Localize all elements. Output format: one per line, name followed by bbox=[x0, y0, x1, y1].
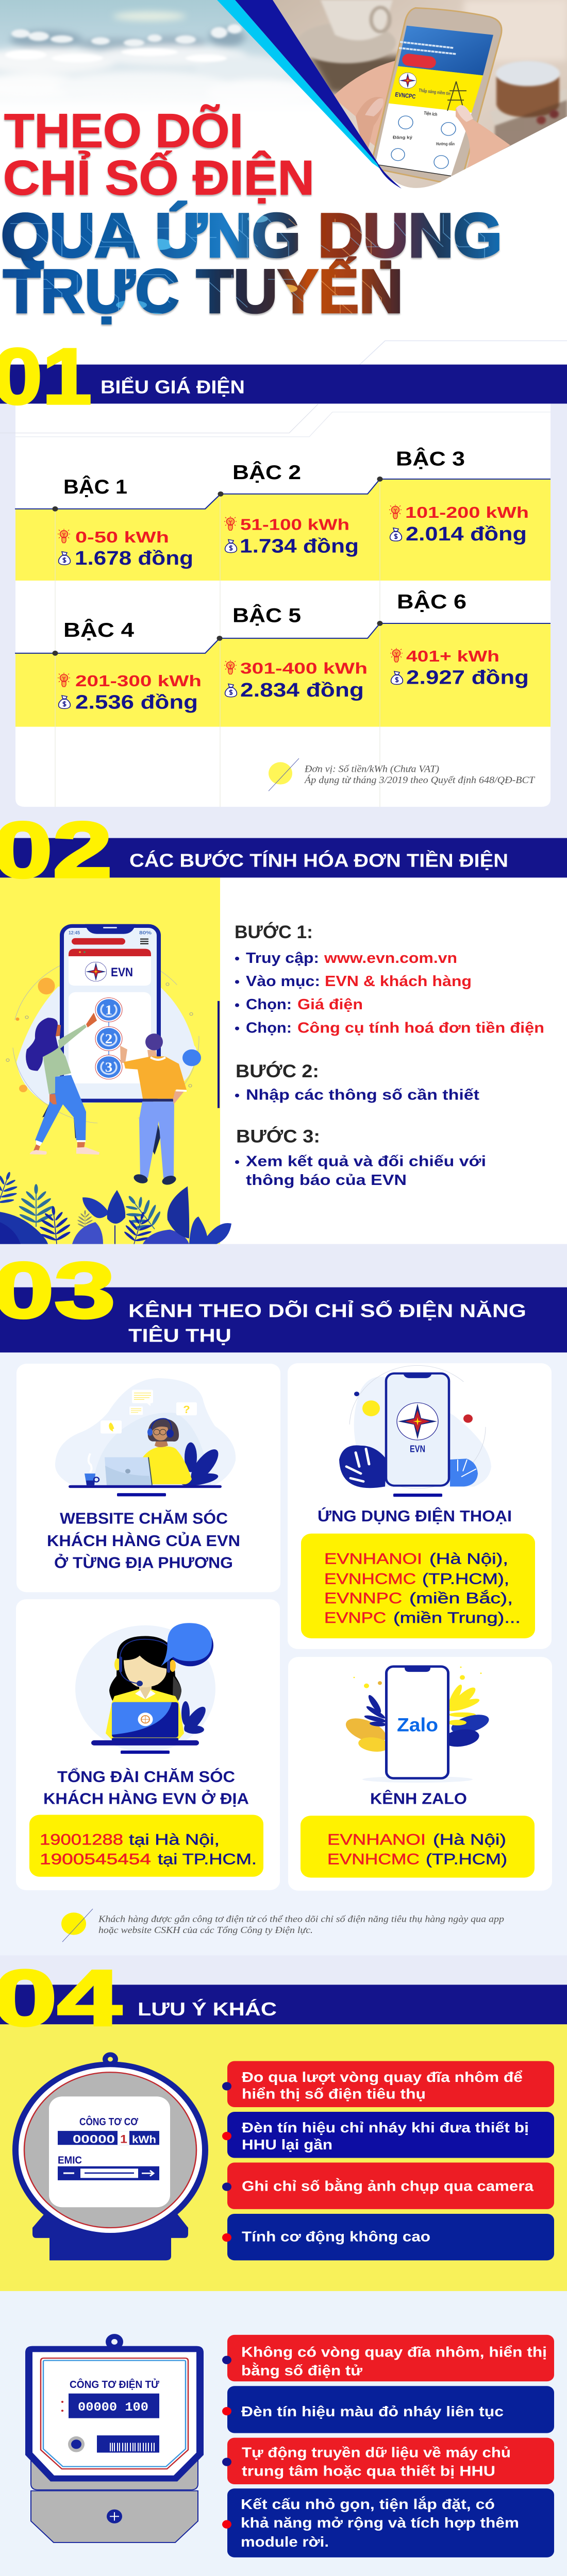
yellow staircase row 2 bbox=[15, 623, 551, 727]
section 03 header bar: KÊNH THEO DÕI CHỈ SỐ ĐIỆN NĂNG bbox=[128, 1299, 526, 1321]
card heading: ỨNG DỤNG ĐIỆN THOẠI bbox=[318, 1507, 512, 1525]
step 1 text bbox=[235, 922, 544, 1036]
tier 4: BẬC 4 bbox=[63, 619, 134, 641]
note: rotation: Đo qua lượt vòng quay đĩa nhôm để bbox=[242, 2070, 523, 2086]
tier 1: 0-50 kWh bbox=[75, 528, 169, 546]
cake and tray bbox=[490, 61, 567, 158]
phone screen: EVNCPC bbox=[395, 91, 416, 100]
note: signal light: Đèn tín hiệu chỉ nháy khi đưa thiết bị bbox=[242, 2120, 529, 2136]
price footnote: Áp dụng từ tháng 3/2019 theo Quyết định 648/QĐ-BCT bbox=[304, 774, 536, 786]
yellow list box: (miền Trung)... bbox=[393, 1609, 521, 1626]
mechanical meter: 00000 bbox=[73, 2133, 115, 2146]
title bbox=[1, 104, 502, 326]
note: photo reading bbox=[222, 2163, 554, 2209]
mechanical meter notes bbox=[222, 2061, 554, 2260]
icon: support agent with laptop bbox=[55, 1378, 236, 1496]
icon: EVN phone: EVN bbox=[410, 1444, 425, 1454]
phone bbox=[62, 924, 159, 1100]
note: mobility bbox=[222, 2214, 554, 2260]
tier 5: 2.834 đồng bbox=[240, 680, 364, 701]
step 3 text: BƯỚC 3: bbox=[236, 1126, 320, 1146]
section 02 header bar bbox=[0, 806, 567, 894]
tier 4: 201-300 kWh bbox=[75, 672, 202, 690]
step circle 3: 3 bbox=[105, 1060, 112, 1075]
card heading: KHÁCH HÀNG CỦA EVN bbox=[47, 1532, 240, 1550]
step 3 text: thông báo của EVN bbox=[246, 1172, 407, 1188]
note: rotation bbox=[222, 2061, 554, 2107]
step 2 text bbox=[235, 1061, 479, 1103]
yellow staircase row 1 bbox=[15, 479, 551, 581]
yellow hotline box: 19001288 bbox=[40, 1831, 123, 1848]
woman pointing bbox=[26, 1012, 99, 1155]
step 2 text: Nhập các thông số cần thiết bbox=[246, 1087, 479, 1103]
icon: support agent with laptop: ? bbox=[183, 1404, 190, 1415]
note: signal light bbox=[222, 2112, 554, 2158]
tier 4: 2.536 đồng bbox=[75, 691, 198, 713]
step 2 text: BƯỚC 2: bbox=[236, 1061, 319, 1081]
note: digital display: bằng số điện tử bbox=[241, 2362, 363, 2379]
tier 2 bbox=[224, 461, 359, 557]
section 02 header bar: CÁC BƯỚC TÍNH HÓA ĐƠN TIỀN ĐIỆN bbox=[129, 850, 508, 871]
phone screen: Thắp sáng niềm tin bbox=[419, 88, 451, 97]
section 02 panels bbox=[0, 877, 567, 1244]
background table and cup bbox=[297, 0, 567, 93]
title: red lines: CHỈ SỐ ĐIỆN bbox=[3, 150, 314, 206]
step 1 text: Giá điện bbox=[297, 996, 363, 1013]
note: mobility: Tính cơ động không cao bbox=[242, 2229, 430, 2245]
tier 5: 301-400 kWh bbox=[240, 659, 368, 677]
step 1 text: BƯỚC 1: bbox=[235, 922, 313, 942]
tier 3: BẬC 3 bbox=[396, 448, 465, 470]
note: compact structure: Kết cấu nhỏ gọn, tiện lắp đặt, có bbox=[241, 2496, 495, 2513]
note: red signal bbox=[222, 2386, 554, 2433]
title: circuit gradient lines: TRỰC TUYẾN bbox=[3, 256, 403, 326]
electronic meter: CÔNG TƠ ĐIỆN TỬ bbox=[70, 2379, 160, 2391]
note: compact structure: khả năng mở rộng và tích hợp thêm bbox=[241, 2515, 519, 2531]
tier 2: BẬC 2 bbox=[232, 461, 301, 483]
mechanical meter: kWh bbox=[132, 2133, 156, 2145]
step 1 text: Công cụ tính hoá đơn tiền điện bbox=[297, 1020, 544, 1036]
man pointing bbox=[120, 1033, 187, 1187]
yellow Zalo box: (TP.HCM) bbox=[426, 1851, 507, 1868]
step 1 text: Vào mục: bbox=[246, 973, 320, 990]
diagonal cyan and blue ribbons bbox=[217, 0, 402, 189]
card heading bbox=[43, 1768, 249, 1807]
channel footnote bbox=[61, 1909, 504, 1942]
phone screen: Hướng dẫn bbox=[436, 141, 455, 146]
channel footnote: hoặc website CSKH của các Tổng Công ty Điện lực. bbox=[98, 1925, 313, 1936]
yellow Zalo box: EVNHANOI bbox=[327, 1831, 426, 1848]
section 04 header bar bbox=[0, 1954, 567, 2042]
section 03 header bar: TIÊU THỤ bbox=[128, 1325, 231, 1346]
card heading: TỔNG ĐÀI CHĂM SÓC bbox=[57, 1768, 235, 1786]
title: circuit gradient lines bbox=[1, 200, 502, 326]
title: red lines bbox=[3, 104, 314, 206]
step 1 text: Chọn: bbox=[246, 1020, 292, 1036]
icon: Zalo phone bbox=[342, 1667, 491, 1783]
left hand bbox=[332, 60, 396, 149]
step 1 text: Chọn: bbox=[246, 996, 292, 1013]
foliage bbox=[0, 1168, 231, 1247]
yellow list box: (miền Bắc), bbox=[409, 1590, 513, 1607]
tier 1 bbox=[58, 476, 193, 569]
card heading: WEBSITE CHĂM SÓC bbox=[60, 1509, 228, 1527]
yellow list box bbox=[301, 1534, 535, 1638]
yellow list box: (TP.HCM), bbox=[422, 1570, 509, 1587]
tier 3: 2.014 đồng bbox=[406, 523, 527, 545]
step 1 text: Truy cập: bbox=[246, 950, 319, 966]
section 01 header bar: BIỂU GIÁ ĐIỆN bbox=[101, 376, 245, 398]
electronic meter notes bbox=[222, 2335, 554, 2557]
title: red lines: THEO DÕI bbox=[4, 104, 243, 157]
background blob and orbits bbox=[6, 955, 201, 1124]
price footnote bbox=[269, 758, 536, 791]
mechanical meter bbox=[12, 2052, 208, 2260]
note: digital display: Không có vòng quay đĩa nhôm, hiển thị bbox=[241, 2344, 547, 2360]
section 01 header bar bbox=[0, 332, 567, 421]
yellow list box: EVNHCMC bbox=[324, 1570, 416, 1587]
step 3 text bbox=[235, 1126, 486, 1188]
section 03 panel bbox=[0, 1352, 567, 1955]
card heading bbox=[47, 1509, 240, 1571]
section 04 backgrounds bbox=[0, 2024, 567, 2576]
phone body bbox=[373, 8, 502, 183]
note: signal light: HHU lại gần bbox=[242, 2137, 332, 2153]
fingers bbox=[356, 97, 510, 171]
illustration: people using EVN phone app bbox=[0, 924, 231, 1247]
note: rotation: hiển thị số điện tiêu thụ bbox=[242, 2086, 426, 2102]
mechanical meter: 1 bbox=[120, 2133, 127, 2146]
phone screen: Tiện ích bbox=[424, 111, 438, 117]
step circle 2 bbox=[95, 1027, 122, 1051]
yellow list box: EVNNPC bbox=[324, 1590, 402, 1607]
tier 1: 1.678 đồng bbox=[75, 548, 193, 569]
icon: call centre agent bbox=[75, 1623, 215, 1754]
step circle 2: 2 bbox=[105, 1031, 112, 1046]
note: data transfer: Tự động truyền dữ liệu về máy chủ bbox=[242, 2445, 511, 2461]
yellow hotline box bbox=[29, 1815, 263, 1877]
note: data transfer: trung tâm hoặc qua thiết bị HHU bbox=[242, 2463, 495, 2479]
mechanical meter: CÔNG TƠ CƠ bbox=[79, 2116, 138, 2128]
card: website bbox=[16, 1364, 280, 1592]
yellow Zalo box bbox=[301, 1816, 535, 1877]
tier 6: BẬC 6 bbox=[397, 590, 466, 613]
tier 2: 1.734 đồng bbox=[240, 535, 359, 557]
step circle 3 bbox=[95, 1055, 122, 1079]
phone: 12:45 bbox=[69, 930, 80, 936]
icon: EVN phone bbox=[339, 1365, 491, 1497]
tier 5: BẬC 5 bbox=[232, 604, 301, 626]
tier 6: 2.927 đồng bbox=[406, 667, 529, 688]
tier 5 bbox=[224, 604, 368, 701]
tier 4 bbox=[58, 619, 202, 713]
yellow Zalo box: EVNHCMC bbox=[327, 1851, 420, 1868]
section 03 header bar bbox=[0, 1246, 567, 1352]
yellow hotline box: tại Hà Nội, bbox=[129, 1831, 220, 1848]
card heading: Ở TỪNG ĐỊA PHƯƠNG bbox=[54, 1553, 233, 1571]
hero photo: hand holding phone with EVNCPC app bbox=[268, 0, 567, 200]
card heading: KHÁCH HÀNG EVN Ở ĐỊA bbox=[43, 1789, 249, 1807]
tier 6 bbox=[390, 590, 529, 688]
phone screen bbox=[375, 26, 493, 176]
note: red signal: Đèn tín hiệu màu đỏ nháy liên tục bbox=[241, 2403, 504, 2420]
phone: 80% bbox=[139, 930, 152, 936]
yellow hotline box: 1900545454 bbox=[40, 1851, 151, 1868]
mechanical meter: EMIC bbox=[58, 2155, 82, 2166]
tier 1: BẬC 1 bbox=[63, 476, 127, 498]
section 01 card bbox=[0, 403, 551, 807]
tier 6: 401+ kWh bbox=[406, 648, 499, 665]
card: call centre bbox=[16, 1599, 280, 1890]
divider bar bbox=[218, 1001, 220, 1108]
electronic meter: 00000 100 bbox=[78, 2400, 148, 2415]
tier 2: 51-100 kWh bbox=[240, 516, 349, 533]
note: digital display bbox=[222, 2335, 554, 2381]
card: phone app bbox=[288, 1363, 552, 1649]
yellow list box: (Hà Nội), bbox=[429, 1550, 508, 1567]
price footnote: Đơn vị: Số tiền/kWh (Chưa VAT) bbox=[304, 764, 439, 774]
section 01 decor lines bbox=[360, 341, 567, 365]
step 1 text: EVN & khách hàng bbox=[325, 973, 472, 990]
electronic meter bbox=[25, 2334, 204, 2543]
step circle 1 bbox=[95, 998, 122, 1022]
note: photo reading: Ghi chỉ số bằng ảnh chụp qua camera bbox=[242, 2178, 534, 2194]
phone: EVN bbox=[111, 965, 133, 979]
yellow list box: EVNHANOI bbox=[324, 1550, 422, 1567]
note: compact structure: module rời. bbox=[241, 2534, 329, 2550]
tier 3 bbox=[389, 448, 529, 545]
tier 3: 101-200 kWh bbox=[405, 503, 529, 521]
step 1 text: www.evn.com.vn bbox=[324, 950, 457, 966]
section 04 header bar: LƯU Ý KHÁC bbox=[138, 1998, 277, 2020]
hero sky with clouds bbox=[0, 0, 299, 87]
channel footnote: Khách hàng được gắn công tơ điện tử có thể theo dõi chỉ số điện năng tiêu thụ hàng ngày qua app bbox=[98, 1914, 504, 1924]
yellow hotline box: tại TP.HCM. bbox=[158, 1851, 257, 1868]
note: compact structure bbox=[222, 2488, 554, 2557]
step circle 1: 1 bbox=[105, 1002, 112, 1018]
step 3 text: Xem kết quả và đối chiếu với bbox=[246, 1153, 486, 1170]
card heading: KÊNH ZALO bbox=[370, 1789, 467, 1807]
icon: Zalo phone: Zalo bbox=[397, 1715, 438, 1736]
phone screen: Đăng ký bbox=[393, 135, 412, 140]
title: circuit gradient lines: QUA ỨNG DỤNG bbox=[1, 200, 502, 270]
note: data transfer bbox=[222, 2438, 554, 2484]
yellow Zalo box: (Hà Nội) bbox=[433, 1831, 506, 1848]
card: Zalo bbox=[288, 1657, 552, 1891]
yellow list box: EVNPC bbox=[324, 1609, 386, 1626]
